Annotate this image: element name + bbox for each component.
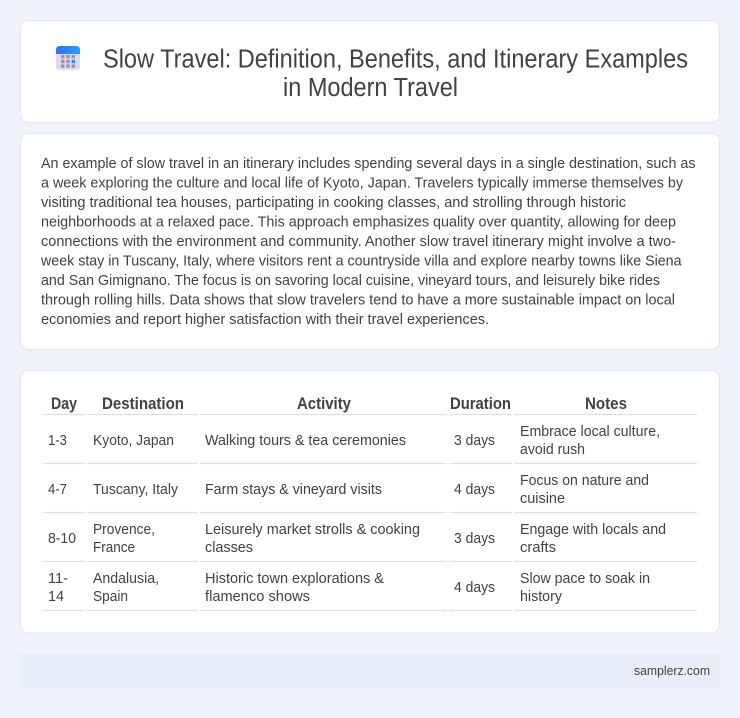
table row: days 4-7: Focus on nature and — [520, 473, 649, 489]
panel: title card — [20, 20, 720, 122]
title: in Modern Travel — [283, 74, 458, 102]
text block: slow travel description: connections with the environment and community. Another slow travel itinerary might involve a two- — [41, 234, 676, 250]
table row: days 8-10: Leisurely market strolls & cooking — [205, 522, 420, 538]
table row: days 11-14: Andalusia, — [93, 571, 159, 587]
table row: days 1-3: avoid rush — [520, 442, 585, 458]
text block: slow travel description: through rolling hills. Data shows that slow travelers tend to have a more sustainable impact on local — [41, 292, 675, 308]
table row: days 4-7: 4-7 — [48, 482, 67, 498]
table row: days 1-3 — [48, 424, 660, 458]
table row: days 4-7: Farm stays & vineyard visits — [205, 482, 382, 498]
table header: Duration — [450, 395, 511, 413]
table header: Day — [51, 395, 78, 413]
table header: Destination — [102, 395, 184, 413]
panel: itinerary table — [20, 370, 720, 633]
table row: days 8-10: classes — [205, 540, 253, 556]
panel: description text — [20, 134, 720, 350]
table row: days 11-14: flamenco shows — [205, 589, 310, 605]
title — [103, 46, 688, 102]
table row: days 8-10: Engage with locals and — [520, 522, 666, 538]
table row: days 1-3: 3 days — [454, 433, 495, 449]
table row: days 1-3: Walking tours & tea ceremonies — [205, 433, 406, 449]
table row: days 1-3: Kyoto, Japan — [93, 433, 174, 449]
footer — [20, 654, 720, 688]
table row: days 4-7: cuisine — [520, 491, 565, 507]
footer source text: samplerz.com — [634, 664, 710, 678]
text block: slow travel description: a week exploring the culture and local life of Kyoto, Japan. Travelers typically immerse themselves by — [41, 176, 684, 192]
table row: days 8-10 — [48, 522, 666, 556]
text block: slow travel description: week stay in Tuscany, Italy, where visitors rent a countryside villa and explore nearby towns like Siena — [40, 254, 682, 270]
table row: days 11-14: 4 days — [454, 580, 495, 596]
table row: days 8-10: France — [93, 540, 135, 556]
title: Slow Travel: Definition, Benefits, and Itinerary Examples — [103, 46, 688, 74]
table row: days 8-10: crafts — [520, 540, 556, 556]
table row: days 8-10: 8-10 — [48, 531, 76, 547]
table row: days 11-14: Historic town explorations & — [205, 571, 384, 587]
table row: days 8-10: Provence, — [93, 522, 155, 538]
text block: slow travel description: economies and report higher satisfaction with their travel experiences. — [41, 312, 489, 328]
table header — [51, 395, 627, 413]
table row: days 11-14: history — [520, 589, 563, 605]
table row: days 1-3: Embrace local culture, — [520, 424, 660, 440]
table row: days 11-14: 14 — [48, 589, 64, 605]
table row: days 11-14: Slow pace to soak in — [520, 571, 650, 587]
text block: slow travel description: An example of slow travel in an itinerary includes spending several days in a single destination, such as — [41, 156, 696, 172]
text block: slow travel description: neighborhoods at a relaxed pace. This approach emphasizes quality over quantity, allowing for deep — [41, 214, 676, 230]
table row: days 4-7 — [48, 473, 649, 507]
table row: days 11-14: 11- — [48, 571, 68, 587]
table header: Activity — [297, 395, 352, 413]
icon: calendar — [56, 46, 80, 70]
text block: slow travel description: visiting traditional tea houses, participating in cooking classes, and strolling through historic — [41, 195, 626, 211]
text block: slow travel description — [40, 156, 696, 328]
table row: days 4-7: 4 days — [454, 482, 495, 498]
table header: Notes — [585, 395, 627, 413]
text block: slow travel description: and San Gimignano. The focus is on savoring local cuisine, vineyard tours, and leisurely bike rides — [41, 273, 660, 289]
table row: days 4-7: Tuscany, Italy — [93, 482, 179, 498]
table row: days 8-10: 3 days — [454, 531, 495, 547]
table row: days 1-3: 1-3 — [48, 433, 67, 449]
table row: days 11-14: Spain — [93, 589, 128, 605]
table row: days 11-14 — [48, 571, 650, 605]
